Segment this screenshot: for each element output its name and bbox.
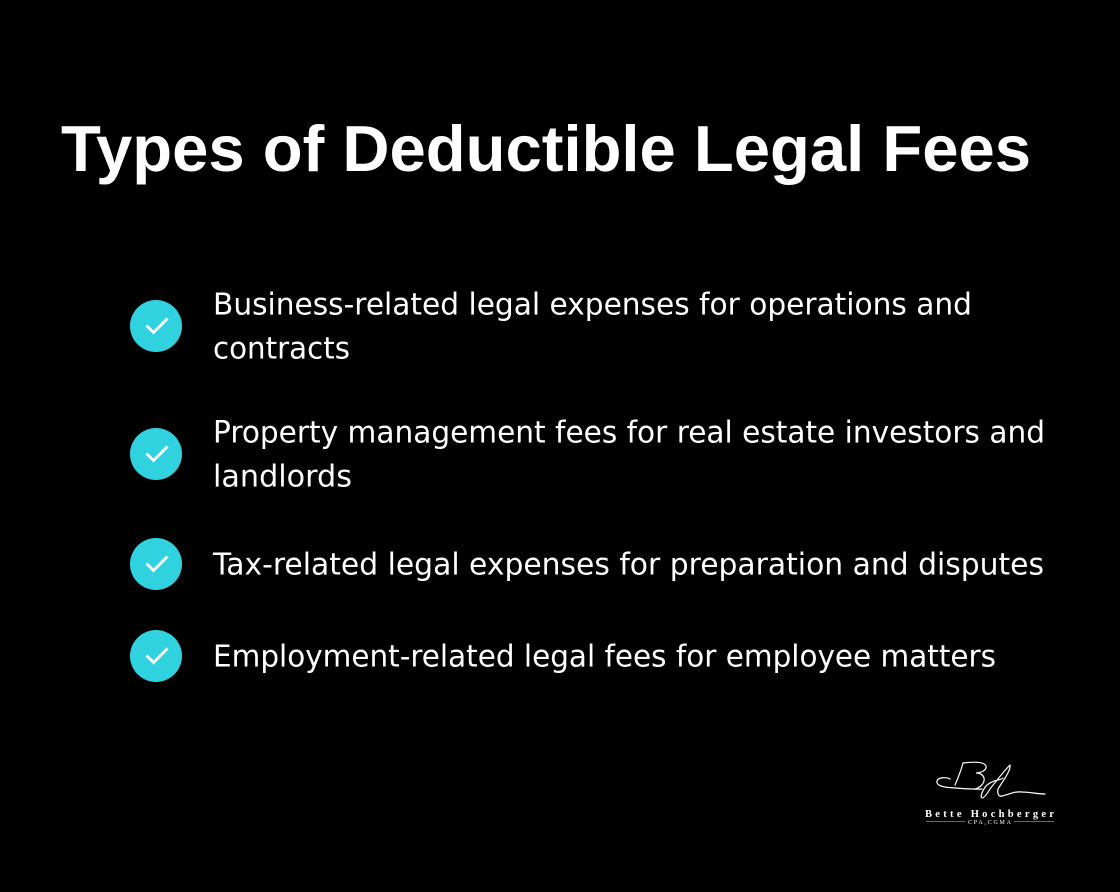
logo credentials: CPA,CGMA xyxy=(968,820,1012,826)
logo: Bette Hochberger signature xyxy=(925,762,1054,826)
list item: property management fees xyxy=(130,416,1045,494)
icon: check circle 4 xyxy=(130,630,182,682)
icon: BH signature xyxy=(937,762,1045,798)
text: item 1: contracts xyxy=(213,332,350,366)
icon: check circle 2 xyxy=(130,428,182,480)
text: item 3: Tax-related legal expenses for preparation and disputes xyxy=(212,548,1044,582)
title: Types of Deductible Legal Fees xyxy=(61,112,1031,185)
text: item 1 xyxy=(213,288,972,366)
icon: check circle 1 xyxy=(130,300,182,352)
logo name: Bette Hochberger xyxy=(925,809,1054,820)
text: item 4: Employment-related legal fees for employee matters xyxy=(213,640,996,674)
text: item 2: landlords xyxy=(213,460,352,494)
list item: tax-related expenses xyxy=(130,538,1044,590)
text: item 1: Business-related legal expenses for operations and xyxy=(213,288,972,322)
icon: check circle 3 xyxy=(130,538,182,590)
list item: business-related expenses xyxy=(130,288,972,366)
list item: employment-related fees xyxy=(130,630,996,682)
text: item 2 xyxy=(213,416,1045,494)
text: item 2: Property management fees for real estate investors and xyxy=(213,416,1045,450)
